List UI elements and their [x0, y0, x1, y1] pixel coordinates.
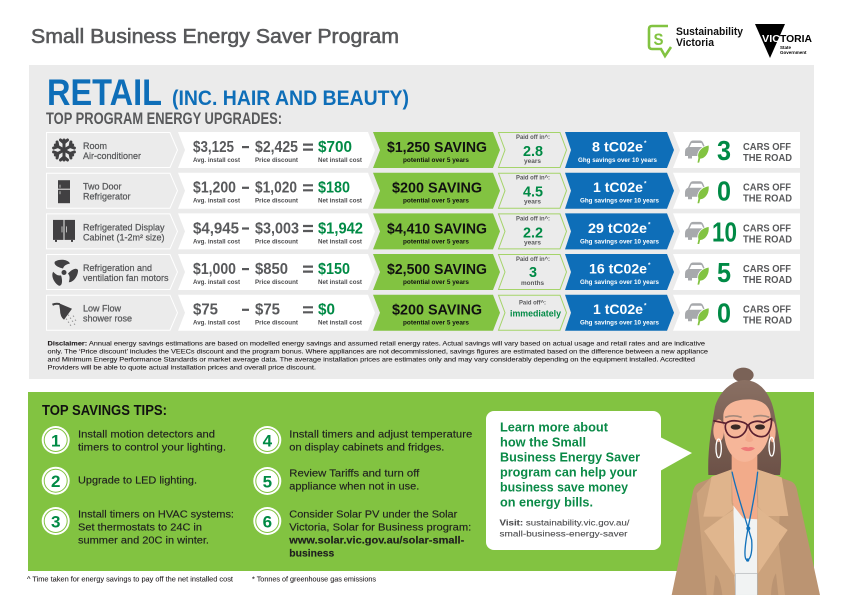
- saving: [392, 302, 482, 327]
- cars off the road: CARS OFF: [743, 263, 792, 275]
- disclaimer: Providers will be able to quote actual installation prices and overall price discount.: [48, 364, 316, 372]
- disclaimer: [48, 340, 708, 372]
- cost equation: $75: [193, 302, 218, 319]
- cost equation: $150: [318, 261, 350, 278]
- item name: ventilation fan motors: [83, 273, 169, 283]
- cost equation: [193, 220, 363, 245]
- item name: shower rose: [83, 314, 132, 324]
- emissions: *: [644, 181, 647, 188]
- cars off the road: THE ROAD: [743, 315, 792, 327]
- payback: months: [521, 280, 544, 287]
- saving: potential over 5 years: [403, 198, 469, 205]
- speech bubble: Visit: sustainability.vic.gov.au/: [500, 518, 630, 528]
- item name: Refrigeration and: [83, 263, 152, 273]
- payback: immediately: [510, 309, 561, 319]
- emissions: [580, 220, 659, 245]
- cars off the road: THE ROAD: [743, 193, 792, 205]
- cost equation: $4,945: [193, 220, 239, 237]
- cost equation: $850: [255, 261, 288, 278]
- cost equation: $1,200: [193, 180, 236, 197]
- tip 3: Install timers on HVAC systems:: [78, 509, 234, 521]
- tip 5: 5: [263, 472, 272, 491]
- speech bubble: [486, 411, 692, 550]
- cars off the road: CARS OFF: [743, 222, 792, 234]
- payback: [516, 133, 550, 165]
- tip 1: Install motion detectors and: [78, 429, 215, 441]
- cost equation: $180: [318, 180, 350, 197]
- cost equation: $1,000: [193, 261, 236, 278]
- logo: Sustainability Victoria: Victoria: [676, 37, 715, 49]
- cost equation: [193, 180, 363, 205]
- emissions: [580, 301, 659, 327]
- cost equation: Net install cost: [318, 238, 363, 245]
- cost equation: $0: [318, 302, 335, 319]
- emissions: Ghg savings over 10 years: [580, 279, 659, 286]
- emissions: 29 tC02e: [588, 220, 647, 236]
- tip 5: [253, 467, 419, 495]
- saving: $1,250 SAVING: [387, 139, 487, 156]
- item name: Air-conditioner: [83, 151, 141, 161]
- payback: [510, 299, 561, 319]
- cars off the road: [717, 257, 792, 288]
- cars off the road: [717, 298, 792, 329]
- saving: potential over 5 years: [403, 157, 469, 164]
- tip 1: 1: [51, 431, 60, 450]
- cost equation: Net install cost: [318, 279, 363, 286]
- logo: Victoria State Government: State: [780, 45, 792, 50]
- logo: Sustainability Victoria: [649, 26, 744, 56]
- tip 3: [42, 507, 234, 547]
- saving: $2,500 SAVING: [387, 261, 487, 278]
- item name: Room: [83, 141, 107, 151]
- emissions: 8 tC02e: [592, 138, 643, 154]
- illustration: woman with lanyard: [672, 368, 820, 595]
- cars off the road: CARS OFF: [743, 304, 792, 316]
- payback: 2.2: [523, 224, 543, 241]
- panel: top savings tips: [28, 392, 814, 571]
- tip 1: [42, 426, 226, 454]
- emissions: [580, 179, 659, 205]
- cost equation: Price discount: [255, 238, 299, 245]
- payback: Paid off in^:: [516, 174, 550, 182]
- cars off the road: 5: [717, 257, 731, 288]
- payback: 4.5: [523, 184, 543, 201]
- payback: [516, 214, 550, 246]
- tip 4: 4: [263, 431, 273, 450]
- payback: 2.8: [523, 143, 543, 160]
- tip 3: Set thermostats to 24C in: [78, 522, 202, 534]
- icon: fan: [50, 260, 80, 287]
- icon: car with leaf: [685, 222, 709, 244]
- cost equation: Price discount: [255, 157, 299, 164]
- logo: Victoria State Government: [755, 24, 812, 58]
- cost equation: Avg. install cost: [193, 320, 241, 327]
- row: low flow shower rose: [46, 295, 800, 331]
- emissions: Ghg savings over 10 years: [580, 320, 659, 327]
- disclaimer: only. The ‘Price discount’ includes the VEECs discount and the program bonus. Where appliances are not decommissioned, savings figures are estimated based on the difference between a new appliance: [48, 348, 708, 356]
- emissions: *: [648, 221, 651, 228]
- saving: $200 SAVING: [392, 302, 482, 319]
- cost equation: $3,003: [255, 220, 299, 237]
- cars off the road: THE ROAD: [743, 233, 792, 245]
- heading: inc hair and beauty: (INC. HAIR AND BEAUTY): [172, 87, 409, 110]
- cost equation: Avg. install cost: [193, 157, 241, 164]
- emissions: Ghg savings over 10 years: [580, 238, 659, 245]
- payback: 3: [529, 264, 537, 281]
- cars off the road: CARS OFF: [743, 141, 792, 153]
- speech bubble: Learn more about: [500, 421, 609, 435]
- emissions: *: [648, 262, 651, 269]
- heading: retail: RETAIL: [47, 72, 162, 113]
- cost equation: Avg. install cost: [193, 198, 241, 205]
- cars off the road: 0: [717, 298, 731, 329]
- tip 5: appliance when not in use.: [289, 481, 419, 493]
- cost equation: Avg. install cost: [193, 238, 241, 245]
- disclaimer: Disclaimer: Annual energy savings estimations are based on modelled energy savings and assumed retail energy rates. Actual savings will vary based on actual usage and retail rates and are indicative: [48, 340, 705, 348]
- payback: Paid off in^:: [516, 214, 550, 222]
- tip 6: Victoria, Solar for Business program:: [289, 522, 471, 534]
- icon: car with leaf: [685, 303, 709, 326]
- item name: Low Flow: [83, 304, 122, 314]
- cost equation: Avg. install cost: [193, 279, 241, 286]
- tip 3: 3: [51, 512, 60, 531]
- disclaimer: and Minimum Energy Performance Standards or market average data. The average installation prices are estimates only and may vary considerably depending on the equipment installed. Accredited: [48, 356, 695, 364]
- tip 4: on display cabinets and fridges.: [289, 442, 444, 454]
- logo: Victoria State Government: TORIA: [780, 33, 812, 45]
- tip 2: [42, 467, 197, 495]
- speech bubble: how the Small: [500, 435, 586, 449]
- logo: Victoria State Government: Government: [780, 50, 807, 55]
- saving: $200 SAVING: [392, 180, 482, 197]
- saving: potential over 5 years: [403, 238, 469, 245]
- emissions: 16 tC02e: [589, 260, 647, 276]
- logo: Sustainability Victoria: Sustainability: [676, 26, 744, 38]
- speech bubble: Business Energy Saver: [500, 451, 640, 465]
- item name: Refrigerated Display: [83, 222, 165, 232]
- title: Small Business Energy Saver Program: [31, 26, 399, 48]
- tip 1: timers to control your lighting.: [78, 442, 226, 454]
- cost equation: [193, 302, 363, 327]
- footnotes: * Tonnes of greenhouse gas emissions: [252, 577, 377, 584]
- emissions: Ghg savings over 10 years: [578, 157, 657, 164]
- cars off the road: THE ROAD: [743, 274, 792, 286]
- cost equation: [193, 139, 363, 164]
- icon: shower rose: [52, 303, 76, 326]
- emissions: *: [644, 140, 647, 147]
- heading: tips: TOP SAVINGS TIPS:: [42, 403, 167, 419]
- cost equation: $2,425: [255, 139, 298, 156]
- row: room air-conditioner: [46, 132, 800, 168]
- saving: [392, 180, 482, 205]
- emissions: [578, 138, 657, 164]
- saving: potential over 5 years: [403, 279, 469, 286]
- speech bubble: program can help your: [500, 465, 637, 479]
- tip 3: summer and 20C in winter.: [78, 535, 209, 547]
- cars off the road: [717, 135, 792, 166]
- cars off the road: [717, 176, 792, 207]
- tip 6: www.solar.vic.gov.au/solar-small-: [288, 535, 465, 547]
- icon: fridge: [58, 180, 70, 203]
- icon: display cabinet: [53, 220, 75, 242]
- icon: car with leaf: [685, 181, 709, 204]
- emissions: 1 tC02e: [593, 179, 643, 195]
- panel: retail upgrades: [29, 65, 814, 379]
- tip 6: 6: [263, 512, 272, 531]
- row: refrigerated display cabinet: [46, 213, 800, 249]
- cost equation: Price discount: [255, 279, 299, 286]
- logo: Victoria State Government: VIC: [762, 33, 780, 45]
- footnotes: ^ Time taken for energy savings to pay off the net installed cost: [27, 577, 233, 584]
- tip 6: [253, 507, 471, 560]
- icon: car with leaf: [685, 262, 709, 285]
- tip 4: Install timers and adjust temperature: [289, 429, 472, 441]
- icon: car with leaf: [685, 140, 709, 163]
- cars off the road: 3: [717, 135, 731, 166]
- cost equation: Net install cost: [318, 157, 363, 164]
- payback: [516, 174, 550, 206]
- emissions: 1 tC02e: [593, 301, 643, 317]
- payback: Paid off in^:: [516, 255, 550, 263]
- cars off the road: [712, 216, 792, 247]
- speech bubble: on energy bills.: [500, 495, 593, 509]
- cars off the road: 10: [712, 216, 737, 247]
- cars off the road: 0: [717, 176, 731, 207]
- icon: snowflake: [54, 140, 74, 160]
- saving: $4,410 SAVING: [387, 220, 487, 237]
- saving: potential over 5 years: [403, 320, 469, 327]
- payback: years: [524, 239, 541, 246]
- emissions: *: [644, 303, 647, 310]
- payback: Paid off in^:: [516, 133, 550, 141]
- tip 2: 2: [51, 472, 60, 491]
- tip 6: Consider Solar PV under the Solar: [289, 509, 458, 521]
- tip 2: Upgrade to LED lighting.: [78, 475, 197, 487]
- saving: [387, 139, 487, 164]
- payback: Paid off^:: [519, 299, 546, 307]
- tip 6: business: [289, 548, 334, 560]
- saving: [387, 261, 487, 286]
- payback: [516, 255, 550, 287]
- cost equation: $1,942: [318, 220, 363, 237]
- subheading: TOP PROGRAM ENERGY UPGRADES:: [46, 110, 282, 128]
- speech bubble: business save money: [500, 480, 628, 494]
- payback: years: [524, 158, 541, 165]
- item name: Refrigerator: [83, 192, 131, 202]
- tip 4: [253, 426, 472, 454]
- row: two door refrigerator: [46, 173, 800, 209]
- logo: Sustainability Victoria: S: [654, 30, 664, 49]
- cost equation: $700: [318, 139, 352, 156]
- cost equation: $75: [255, 302, 280, 319]
- footnotes: [27, 577, 377, 584]
- row: refrigeration and ventilation fan motors: [46, 254, 800, 290]
- tip 5: Review Tariffs and turn off: [289, 468, 419, 480]
- cost equation: Net install cost: [318, 320, 363, 327]
- speech bubble: small-business-energy-saver: [500, 529, 628, 539]
- item name: Two Door: [83, 182, 122, 192]
- cost equation: $1,020: [255, 180, 297, 197]
- cars off the road: CARS OFF: [743, 182, 792, 194]
- saving: [387, 220, 487, 245]
- cost equation: [193, 261, 363, 286]
- cars off the road: THE ROAD: [743, 152, 792, 164]
- emissions: [580, 260, 659, 286]
- payback: years: [524, 199, 541, 206]
- emissions: Ghg savings over 10 years: [580, 198, 659, 205]
- cost equation: $3,125: [193, 139, 234, 156]
- cost equation: Price discount: [255, 320, 299, 327]
- cost equation: Net install cost: [318, 198, 363, 205]
- item name: Cabinet (1-2m² size): [83, 232, 165, 242]
- cost equation: Price discount: [255, 198, 299, 205]
